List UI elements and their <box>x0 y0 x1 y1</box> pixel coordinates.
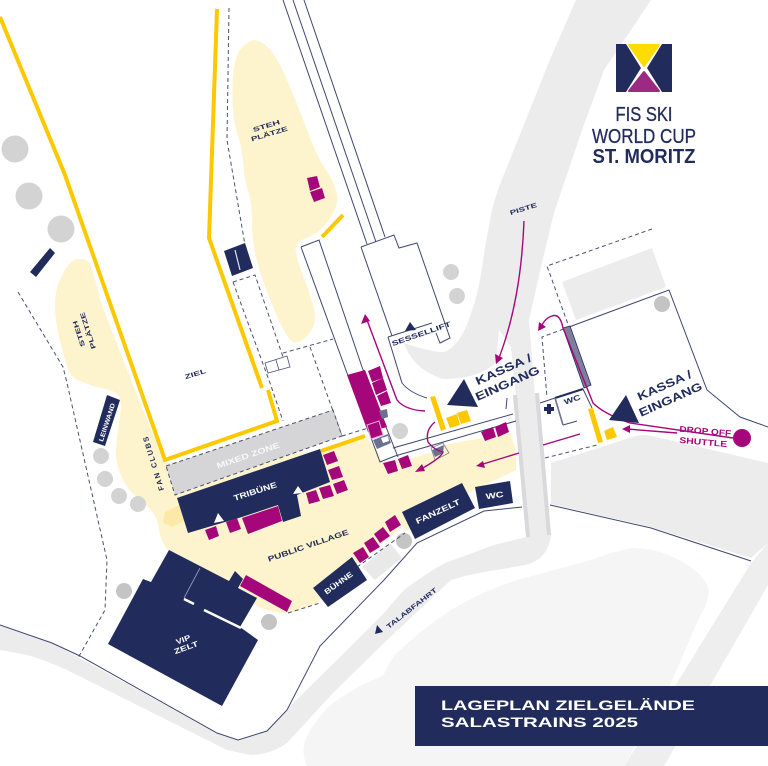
arrow: drop off to square <box>622 425 677 433</box>
white path beside Bühne <box>355 526 412 585</box>
label: Steh Plätze west <box>72 310 98 350</box>
WC south: WC <box>485 490 504 501</box>
WC south <box>475 481 513 509</box>
label: Piste: PISTE <box>509 202 539 217</box>
Kassa east: EINGANG <box>637 381 704 420</box>
drop off shuttle <box>679 424 751 449</box>
navy bar west <box>30 248 55 277</box>
Kassa west: EINGANG <box>474 365 542 404</box>
mixed zone: MIXED ZONE <box>216 440 282 471</box>
turnstile strip east <box>563 326 591 388</box>
stands near Bühne <box>353 515 401 563</box>
Sessellift: SESSELLIFT <box>391 321 453 348</box>
Sessellift <box>391 321 453 348</box>
terrain: bridge strips <box>513 393 551 537</box>
logo: FIS SKI <box>616 103 672 126</box>
drop off shuttle: SHUTTLE <box>679 435 728 449</box>
public village and standing area west <box>55 259 516 613</box>
grey path beside Bühne <box>362 543 402 580</box>
VIP catering <box>240 575 292 612</box>
WC east <box>555 389 583 425</box>
terrain: piste <box>404 0 651 396</box>
terrain: upper right grey field <box>562 248 666 320</box>
stands north <box>307 176 325 202</box>
Fanzelt: FANZELT <box>414 497 462 526</box>
label: Talabfahrt: TALABFAHRT <box>385 587 439 631</box>
standing area north <box>232 40 337 342</box>
label: Steh Plätze west: PLÄTZE <box>78 310 98 350</box>
Tribüne <box>177 449 330 534</box>
terrain: right diagonal road <box>624 543 768 766</box>
Leinwand: LEINWAND <box>98 402 117 443</box>
Kassa east: KASSA / <box>636 369 695 404</box>
arrow: stairs to village <box>415 422 443 472</box>
Fanzelt <box>402 483 475 539</box>
drop off shuttle: DROP OFF <box>679 424 732 438</box>
Bühne <box>313 557 367 607</box>
label: Steh Plätze west: STEH <box>72 319 87 347</box>
title banner: SALASTRAINS 2025 <box>441 714 638 730</box>
label: Steh Plätze north <box>250 119 290 143</box>
arrow: drop off to Kassa <box>538 316 733 438</box>
merch stands around Tribüne <box>205 451 348 540</box>
stairs at entrance <box>431 443 449 460</box>
label: Public Village: PUBLIC VILLAGE <box>267 528 350 564</box>
label: Steh Plätze north: PLÄTZE <box>250 124 290 143</box>
title banner <box>415 686 768 746</box>
Kassa east <box>588 369 704 443</box>
Kassa west <box>430 352 542 431</box>
small rect by finish <box>265 356 290 373</box>
arrow: Piste to Kassa <box>495 221 524 364</box>
grey circles: trees <box>2 136 670 630</box>
stands near entrance <box>383 422 509 474</box>
VIP Zelt: ZELT <box>173 639 200 656</box>
logo <box>592 44 696 168</box>
label: Steh Plätze north: STEH <box>252 119 281 134</box>
label: Talabfahrt <box>375 587 439 634</box>
Leinwand <box>93 395 120 446</box>
darker beige patch <box>163 505 186 527</box>
Kassa west: KASSA / <box>474 352 535 388</box>
mixed zone <box>166 410 342 495</box>
terrain: light snow field <box>304 548 709 766</box>
Bühne: BÜHNE <box>323 570 355 596</box>
title banner: LAGEPLAN ZIELGELÄNDE <box>441 697 695 713</box>
arrow: into village <box>476 434 580 468</box>
terrain: Talabfahrt road <box>0 393 551 755</box>
dashed boundaries <box>18 8 652 658</box>
arrow: up to lift <box>361 314 425 411</box>
terrain: right grey area <box>551 435 768 558</box>
logo: WORLD CUP <box>592 125 696 148</box>
icon: first aid cross <box>544 404 554 414</box>
WC east: WC <box>563 392 582 407</box>
Tribüne: TRIBÜNE <box>232 480 279 503</box>
label: Fan Clubs: FAN CLUBS <box>141 436 166 492</box>
finish area fence <box>0 9 365 460</box>
main catering block <box>347 366 391 449</box>
Leinwand east <box>224 243 253 276</box>
VIP Zelt <box>108 550 258 706</box>
logo: ST. MORITZ <box>592 145 696 168</box>
label: Ziel: ZIEL <box>184 368 207 381</box>
VIP Zelt: VIP <box>175 633 192 646</box>
